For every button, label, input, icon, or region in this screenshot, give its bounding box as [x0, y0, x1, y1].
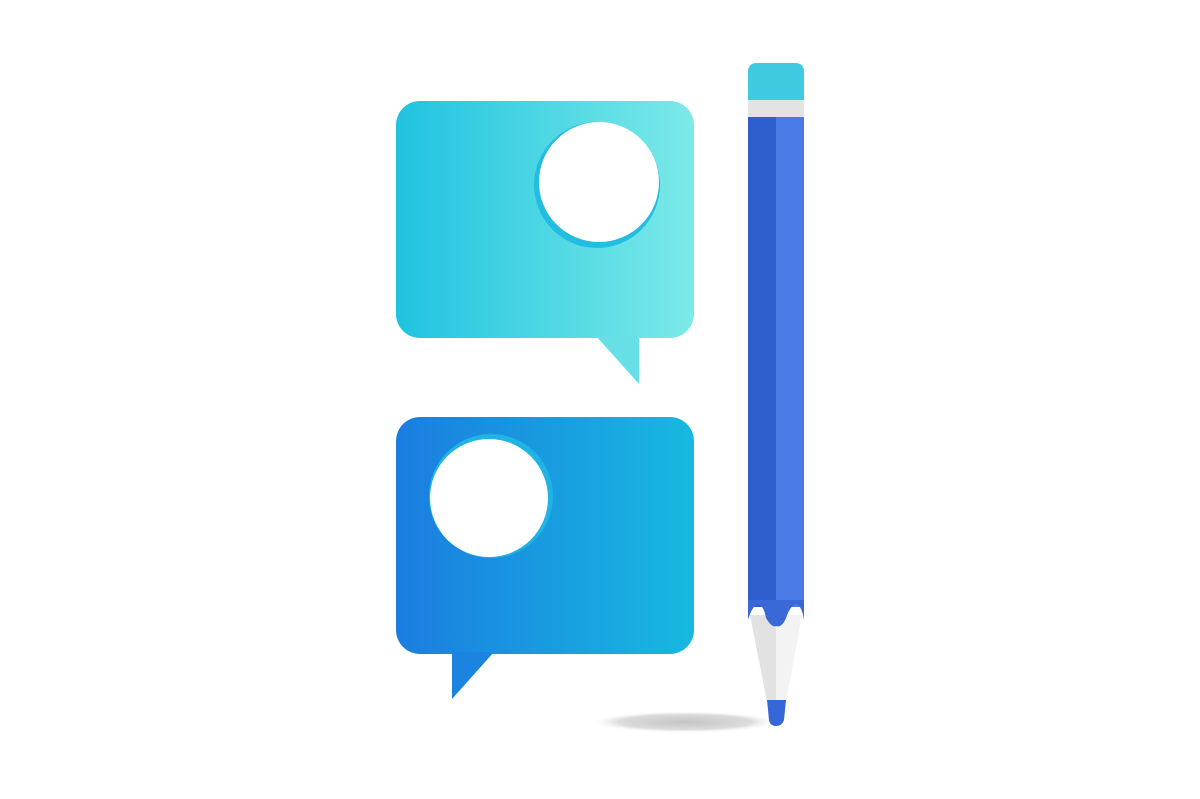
- pencil eraser cap: [748, 63, 804, 100]
- bubble: bottom: [396, 417, 694, 699]
- bubble: top: [396, 101, 694, 384]
- pencil: [748, 63, 804, 726]
- shadow under pencil: [590, 711, 780, 733]
- circle: bottom bubble: [429, 434, 553, 558]
- pencil wood tip: [750, 615, 776, 702]
- pencil body: [748, 117, 776, 607]
- pencil scallops: [748, 600, 804, 626]
- pencil lead: [767, 700, 786, 726]
- circle: top bubble: [534, 122, 660, 248]
